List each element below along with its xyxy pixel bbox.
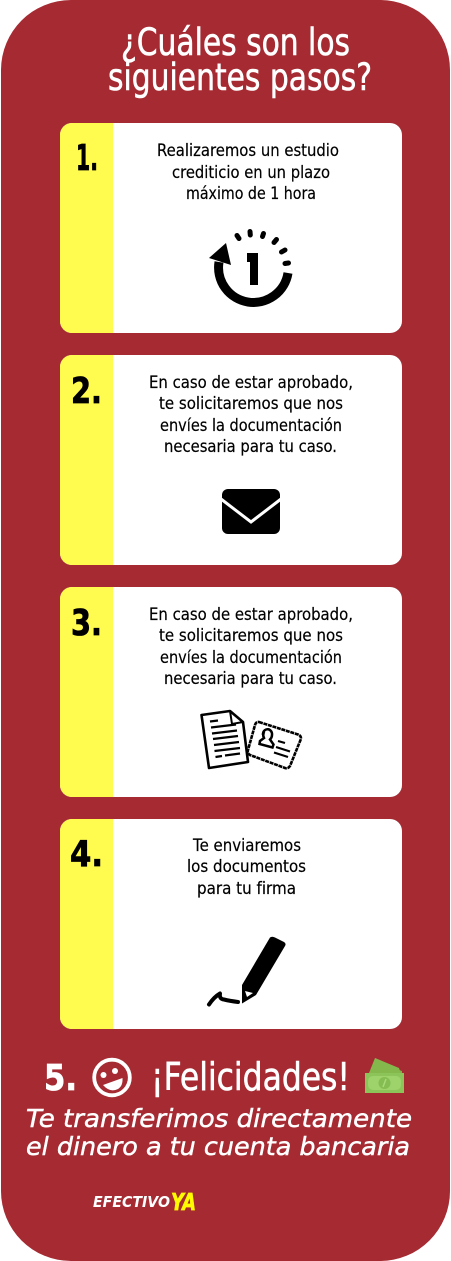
step 1 text: crediticio en un plazo <box>172 163 330 182</box>
congratulations text: ¡Felicidades! <box>151 1055 350 1099</box>
icon: money <box>365 1058 404 1093</box>
step 2 text: necesaria para tu caso. <box>164 437 337 456</box>
step 3 text: necesaria para tu caso. <box>164 669 337 688</box>
number 4: 4. <box>70 834 103 875</box>
logo: Efectivo Ya <box>93 1190 196 1216</box>
title: ¿Cuáles son los <box>121 21 350 64</box>
step 1 text <box>157 141 339 203</box>
number 3: 3. <box>71 603 102 644</box>
panel: step 3 <box>60 587 402 797</box>
step 3 text: te solicitaremos que nos <box>159 626 343 645</box>
step 4 text: para tu firma <box>197 879 296 898</box>
number 1: 1. <box>76 138 98 179</box>
logo: Efectivo Ya: YA <box>171 1190 196 1216</box>
card background 1 <box>60 123 402 333</box>
heading: step 5 <box>44 1055 404 1099</box>
step 2 text <box>149 373 353 456</box>
step 2 text: te solicitaremos que nos <box>159 394 343 413</box>
yellow band 2 <box>60 355 113 565</box>
yellow band 4 <box>60 819 113 1029</box>
step 1 text: Realizaremos un estudio <box>157 141 339 160</box>
number 2: 2. <box>71 371 102 412</box>
number 5: 5. <box>44 1058 77 1099</box>
icon: pen signing <box>209 937 286 1004</box>
card background 4 <box>60 819 402 1029</box>
step 2 text: En caso de estar aprobado, <box>149 373 353 392</box>
step 2 text: envíes la documentación <box>160 416 342 435</box>
title: siguientes pasos? <box>108 56 372 99</box>
text block: transfer message: el dinero a tu cuenta bancaria <box>26 1132 410 1161</box>
card background 2 <box>60 355 402 565</box>
step 4 text: Te enviaremos <box>192 836 301 855</box>
yellow band 3 <box>60 587 113 797</box>
logo: Efectivo Ya: EFECTIVO <box>93 1193 170 1211</box>
step 3 text <box>149 605 353 688</box>
panel: step 2 <box>60 355 402 565</box>
icon: envelope <box>221 489 281 534</box>
text block: transfer message <box>26 1104 412 1161</box>
title <box>108 21 372 99</box>
panel: step 1 <box>60 123 402 333</box>
icon: smiley <box>94 1060 130 1095</box>
step 3 text: En caso de estar aprobado, <box>149 605 353 624</box>
panel: step 4 <box>60 819 402 1029</box>
yellow band 1 <box>60 123 113 333</box>
step 4 text: los documentos <box>187 857 306 876</box>
card background 3 <box>60 587 402 797</box>
step 1 text: máximo de 1 hora <box>186 184 316 203</box>
icon: clock arrow with 1 <box>209 232 288 302</box>
step 4 text <box>187 836 306 898</box>
text block: transfer message: Te transferimos directamente <box>26 1104 412 1133</box>
icon: document and ID card <box>202 711 301 768</box>
step 3 text: envíes la documentación <box>160 648 342 667</box>
